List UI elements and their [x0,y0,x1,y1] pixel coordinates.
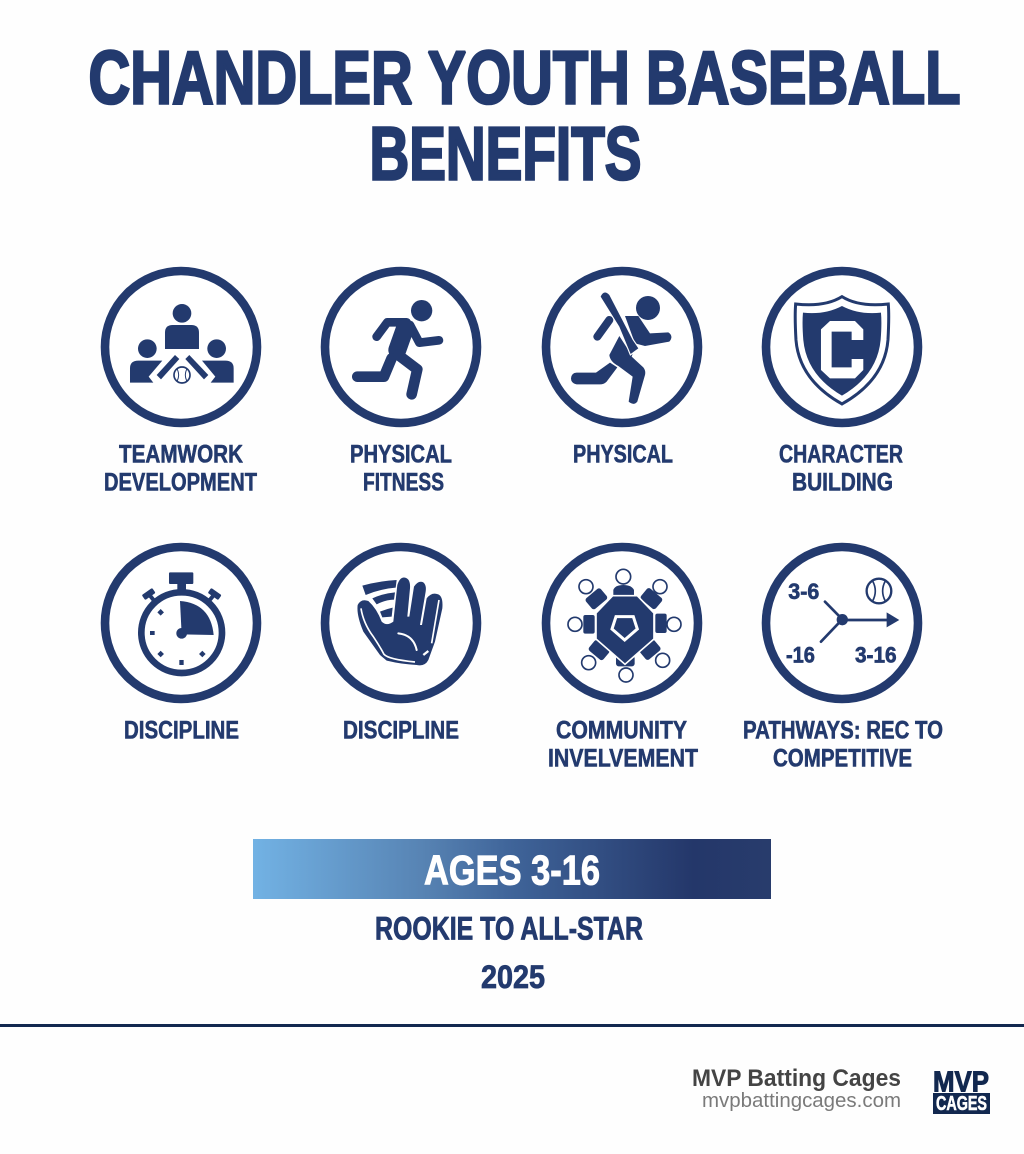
label: teamwork development: DEVELOPMENT [104,469,257,497]
panel: character building [766,271,918,497]
footer brand text [692,1065,901,1112]
label: physical fitness [350,441,452,497]
label: teamwork development: TEAMWORK [119,441,243,469]
panel: teamwork development [104,271,257,497]
label: pathways rec to competitive: COMPETITIVE [773,745,912,773]
footer brand text: mvpbattingcages.com [702,1090,901,1112]
label: physical: PHYSICAL [573,441,673,469]
icon: shield with letter C [795,297,889,404]
panel: physical fitness [325,271,477,497]
panel: discipline glove [325,547,477,745]
panel: community involvement [546,547,698,773]
icon: runner with bat [571,293,671,404]
panel: physical [546,271,698,469]
title [88,36,960,196]
icon: runner [357,300,439,394]
age banner: AGES 3-16 [424,846,600,893]
label: character building: CHARACTER [779,441,903,469]
label: physical fitness: FITNESS [363,469,444,497]
label: pathways rec to competitive: PATHWAYS: REC TO [743,717,943,745]
age banner [253,839,771,899]
label: discipline: DISCIPLINE [124,717,239,745]
label: discipline: DISCIPLINE [343,717,459,745]
icon: age pathway diagram: 3-16 [855,642,897,667]
footer divider [0,1024,1024,1027]
icon: age pathway diagram [786,579,899,667]
subtitle: rookie to all-star: ROOKIE TO ALL-STAR [375,911,643,947]
title: BENEFITS [370,112,642,196]
label: community involvement [548,717,698,773]
panel: pathways rec to competitive [743,547,943,773]
logo: MVP Cages: MVP [933,1066,989,1098]
label: community involvement: COMMUNITY [556,717,687,745]
logo: MVP Cages [933,1066,990,1115]
label: character building [779,441,903,497]
icon: baseball glove [357,578,442,665]
icon: age pathway diagram: -16 [786,642,815,667]
label: teamwork development [104,441,257,497]
icon: age pathway diagram: 3-6 [788,579,819,604]
icon: stopwatch [141,572,222,673]
footer brand text: MVP Batting Cages [692,1065,901,1092]
label: character building: BUILDING [792,469,893,497]
logo: MVP Cages: CAGES [936,1093,987,1115]
icon: people around home plate table [568,569,681,682]
label: pathways rec to competitive [743,717,943,773]
label: community involvement: INVELVEMENT [548,745,698,773]
panel: discipline stopwatch [105,547,257,745]
year: 2025 [481,959,545,995]
icon: three players with bats and ball [130,304,234,383]
label: physical fitness: PHYSICAL [350,441,452,469]
